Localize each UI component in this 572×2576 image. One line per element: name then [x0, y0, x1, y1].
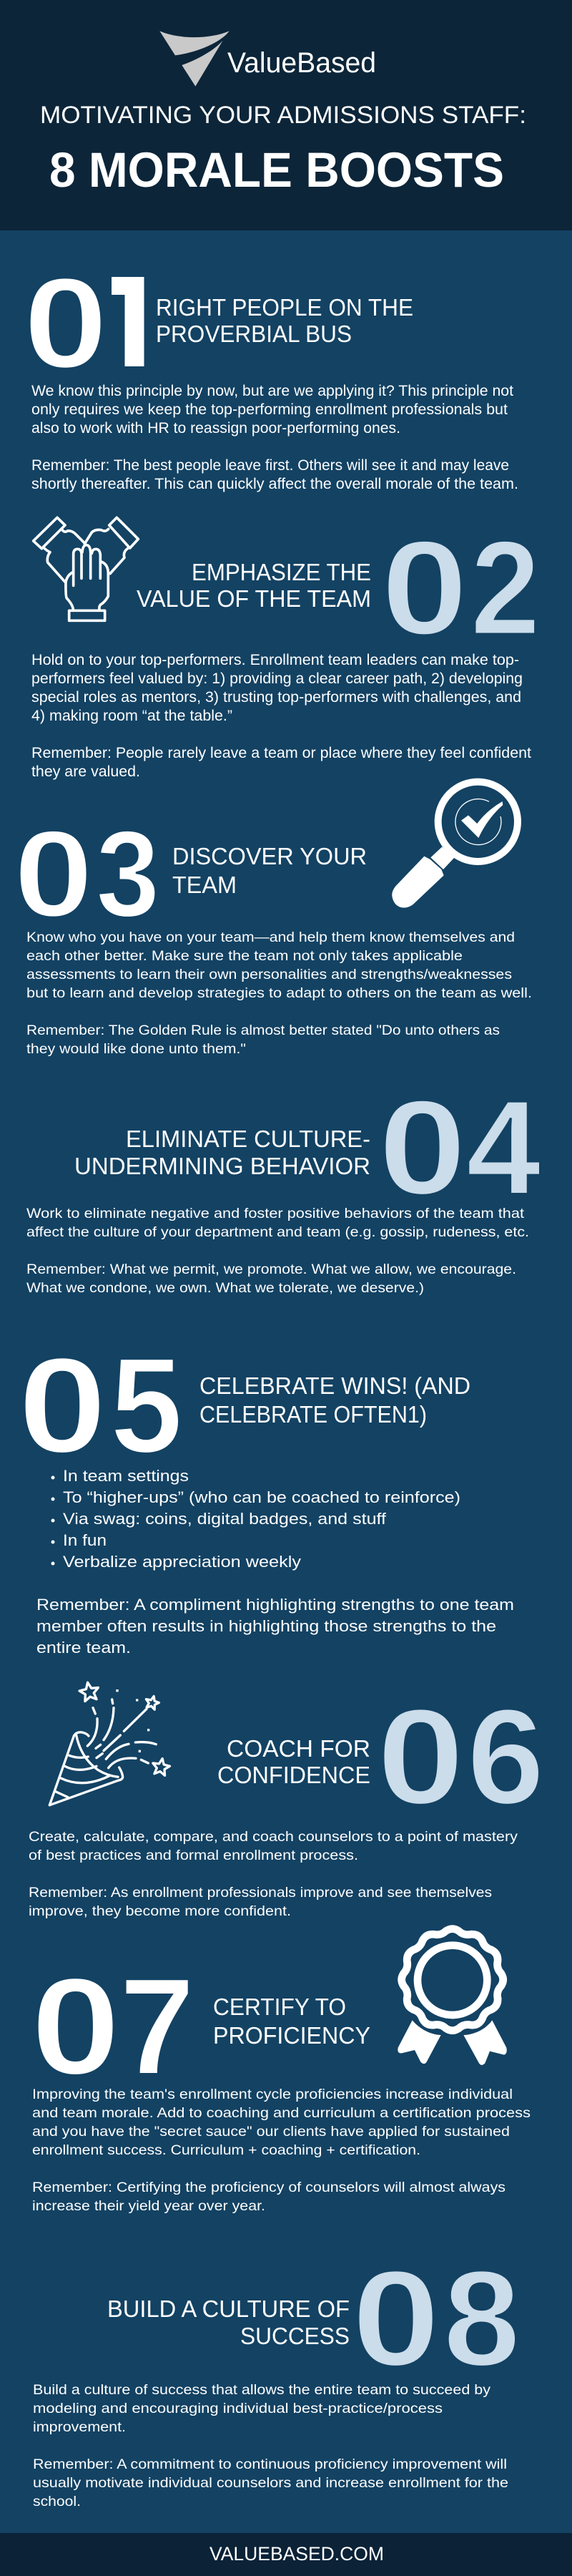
logo wordmark: ValueBased	[227, 47, 376, 79]
text block 08: Build a culture of success that allows the entire team to succeed by	[33, 2382, 490, 2398]
number 03	[14, 806, 160, 943]
panel: section 01	[30, 277, 518, 492]
icon: team hands	[34, 517, 138, 620]
number 06: 6	[467, 1682, 545, 1833]
text block 07	[32, 2087, 531, 2214]
text block 02: performers feel valued by: 1) providing a clear career path, 2) developing	[31, 670, 523, 687]
number 01	[30, 277, 144, 368]
heading 05: CELEBRATE OFTEN1)	[199, 1401, 427, 1428]
panel: section 08	[33, 2243, 521, 2509]
text block 06: Remember: As enrollment professionals improve and see themselves	[29, 1885, 492, 1901]
icon: ValueBased triangle mark	[159, 31, 230, 87]
bullet list: Verbalize appreciation weekly	[63, 1553, 302, 1571]
text block 07: Improving the team's enrollment cycle proficiencies increase individual	[32, 2087, 513, 2102]
heading 04: UNDERMINING BEHAVIOR	[74, 1153, 370, 1179]
number 04	[378, 1072, 541, 1222]
text block 07: and you have the "secret sauce" our clients have applied for sustained	[32, 2124, 510, 2140]
text block 04	[26, 1206, 529, 1296]
text block 05	[36, 1596, 514, 1657]
text block 06: of best practices and formal enrollment process.	[29, 1848, 358, 1863]
footer	[0, 2533, 572, 2576]
text block 08: Remember: A commitment to continuous proficiency improvement will	[33, 2457, 507, 2472]
heading 01	[156, 294, 413, 347]
bullet list: In fun	[63, 1531, 107, 1549]
text block 03: assessments to learn their own personalities and strengths/weaknesses	[26, 967, 512, 982]
text block 06: improve, they become more confident.	[29, 1903, 291, 1919]
heading 06: CONFIDENCE	[217, 1762, 370, 1788]
panel: section 02	[31, 513, 541, 780]
number 02	[381, 513, 541, 663]
number 07: 7	[119, 1949, 194, 2104]
heading 02: VALUE OF THE TEAM	[137, 585, 371, 612]
number 07	[31, 1949, 194, 2104]
number 07: 0	[31, 1949, 120, 2104]
icon: party popper	[49, 1681, 171, 1805]
panel: section 07	[31, 1926, 531, 2214]
title: 8 MORALE BOOSTS	[49, 142, 504, 197]
text block 04: What we condone, we own. What we tolerate, we deserve.)	[26, 1280, 424, 1296]
header panel	[0, 0, 572, 230]
text block 08: school.	[33, 2494, 81, 2509]
number 03: 0	[14, 806, 93, 943]
text block 08: modeling and encouraging individual best-practice/process	[33, 2401, 443, 2416]
text block 01: also to work with HR to reassign poor-performing ones.	[31, 420, 400, 436]
number 05: 5	[110, 1330, 183, 1481]
number 05	[18, 1330, 183, 1481]
text block 04: Remember: What we permit, we promote. What we allow, we encourage.	[26, 1262, 516, 1277]
icon: award rosette	[398, 1926, 507, 2065]
number 02: 0	[381, 513, 468, 663]
number 06	[377, 1682, 545, 1833]
text block 02	[31, 652, 531, 780]
text block 03: Remember: The Golden Rule is almost better stated "Do unto others as	[26, 1023, 500, 1038]
text block 05: Remember: A compliment highlighting strengths to one team	[36, 1596, 514, 1614]
number 06: 0	[377, 1682, 465, 1833]
text block 03	[26, 930, 532, 1057]
panel: section 04	[26, 1072, 541, 1296]
number 04: 0	[378, 1072, 466, 1222]
text block 07: and team morale. Add to coaching and curriculum a certification process	[32, 2105, 531, 2121]
heading 01: RIGHT PEOPLE ON THE	[156, 294, 413, 321]
heading 07	[213, 1994, 370, 2049]
heading 02: EMPHASIZE THE	[192, 559, 371, 585]
subtitle: MOTIVATING YOUR ADMISSIONS STAFF:	[40, 102, 526, 129]
bullet list: To “higher-ups” (who can be coached to reinforce)	[63, 1488, 460, 1506]
text block 04: Work to eliminate negative and foster positive behaviors of the team that	[26, 1206, 525, 1221]
text block 01	[31, 383, 518, 492]
text block 01: shortly thereafter. This can quickly affect the overall morale of the team.	[31, 476, 518, 492]
text block 01: only requires we keep the top-performing enrollment professionals but	[31, 401, 508, 418]
text block 03: they would like done unto them."	[26, 1041, 246, 1057]
heading 08: BUILD A CULTURE OF	[107, 2296, 350, 2322]
text block 01: Remember: The best people leave first. Others will see it and may leave	[31, 457, 509, 474]
number 04: 4	[466, 1072, 541, 1222]
text block 05: member often results in highlighting those strengths to the	[36, 1617, 496, 1635]
text block 08: usually motivate individual counselors and increase enrollment for the	[33, 2475, 508, 2491]
panel: section 05	[18, 1330, 514, 1657]
heading 08	[107, 2296, 350, 2349]
text block 08	[33, 2382, 508, 2509]
heading 07: CERTIFY TO	[213, 1994, 346, 2020]
heading 07: PROFICIENCY	[213, 2022, 370, 2049]
heading 04: ELIMINATE CULTURE-	[126, 1126, 370, 1152]
logo	[159, 31, 376, 87]
number 08: 0	[352, 2243, 440, 2394]
heading 08: SUCCESS	[240, 2323, 350, 2349]
heading 06: COACH FOR	[227, 1735, 370, 1762]
number 02: 2	[470, 513, 541, 663]
heading 01: PROVERBIAL BUS	[156, 321, 352, 347]
text block 02: Hold on to your top-performers. Enrollment team leaders can make top-	[31, 652, 519, 668]
text block 06: Create, calculate, compare, and coach counselors to a point of mastery	[29, 1829, 518, 1845]
text block 05: entire team.	[36, 1639, 131, 1657]
footer url: VALUEBASED.COM	[209, 2543, 384, 2565]
icon: magnifier with check	[392, 782, 518, 908]
text block 08: improvement.	[33, 2419, 126, 2435]
text block 04: affect the culture of your department and team (e.g. gossip, rudeness, etc.	[26, 1224, 529, 1240]
text block 02: 4) making room “at the table.”	[31, 708, 232, 724]
heading 03: TEAM	[172, 872, 237, 898]
number 08	[352, 2243, 521, 2394]
text block 07: enrollment success. Curriculum + coaching + certification.	[32, 2142, 420, 2158]
bullet list: In team settings	[63, 1467, 189, 1485]
panel: section 06	[29, 1681, 545, 1919]
bullet list	[51, 1467, 460, 1571]
heading 03	[172, 843, 367, 898]
number 05: 0	[18, 1330, 107, 1481]
heading 06	[217, 1735, 370, 1788]
text block 01: We know this principle by now, but are we applying it? This principle not	[31, 383, 513, 399]
number 08: 8	[443, 2243, 521, 2394]
text block 07: increase their yield year over year.	[32, 2198, 265, 2214]
bullet list: Via swag: coins, digital badges, and stuff	[63, 1510, 387, 1528]
text block 07: Remember: Certifying the proficiency of counselors will almost always	[32, 2180, 506, 2195]
number 01: 0	[23, 252, 108, 395]
heading 05	[199, 1372, 470, 1428]
text block 03: Know who you have on your team—and help them know themselves and	[26, 930, 515, 945]
text block 02: Remember: People rarely leave a team or place where they feel confident	[31, 745, 531, 761]
heading 03: DISCOVER YOUR	[172, 843, 367, 869]
heading 04	[74, 1126, 370, 1179]
number 01: 1	[89, 253, 172, 394]
heading 02	[137, 559, 371, 612]
text block 03: but to learn and develop strategies to adapt to others on the team as well.	[26, 985, 532, 1001]
number 03: 3	[96, 806, 160, 943]
text block 03: each other better. Make sure the team not only takes applicable	[26, 948, 463, 964]
heading 05: CELEBRATE WINS! (AND	[199, 1372, 470, 1399]
text block 06	[29, 1829, 518, 1919]
panel: section 03	[14, 782, 532, 1057]
text block 02: special roles as mentors, 3) trusting top-performers with challenges, and	[31, 689, 521, 706]
text block 02: they are valued.	[31, 763, 140, 780]
